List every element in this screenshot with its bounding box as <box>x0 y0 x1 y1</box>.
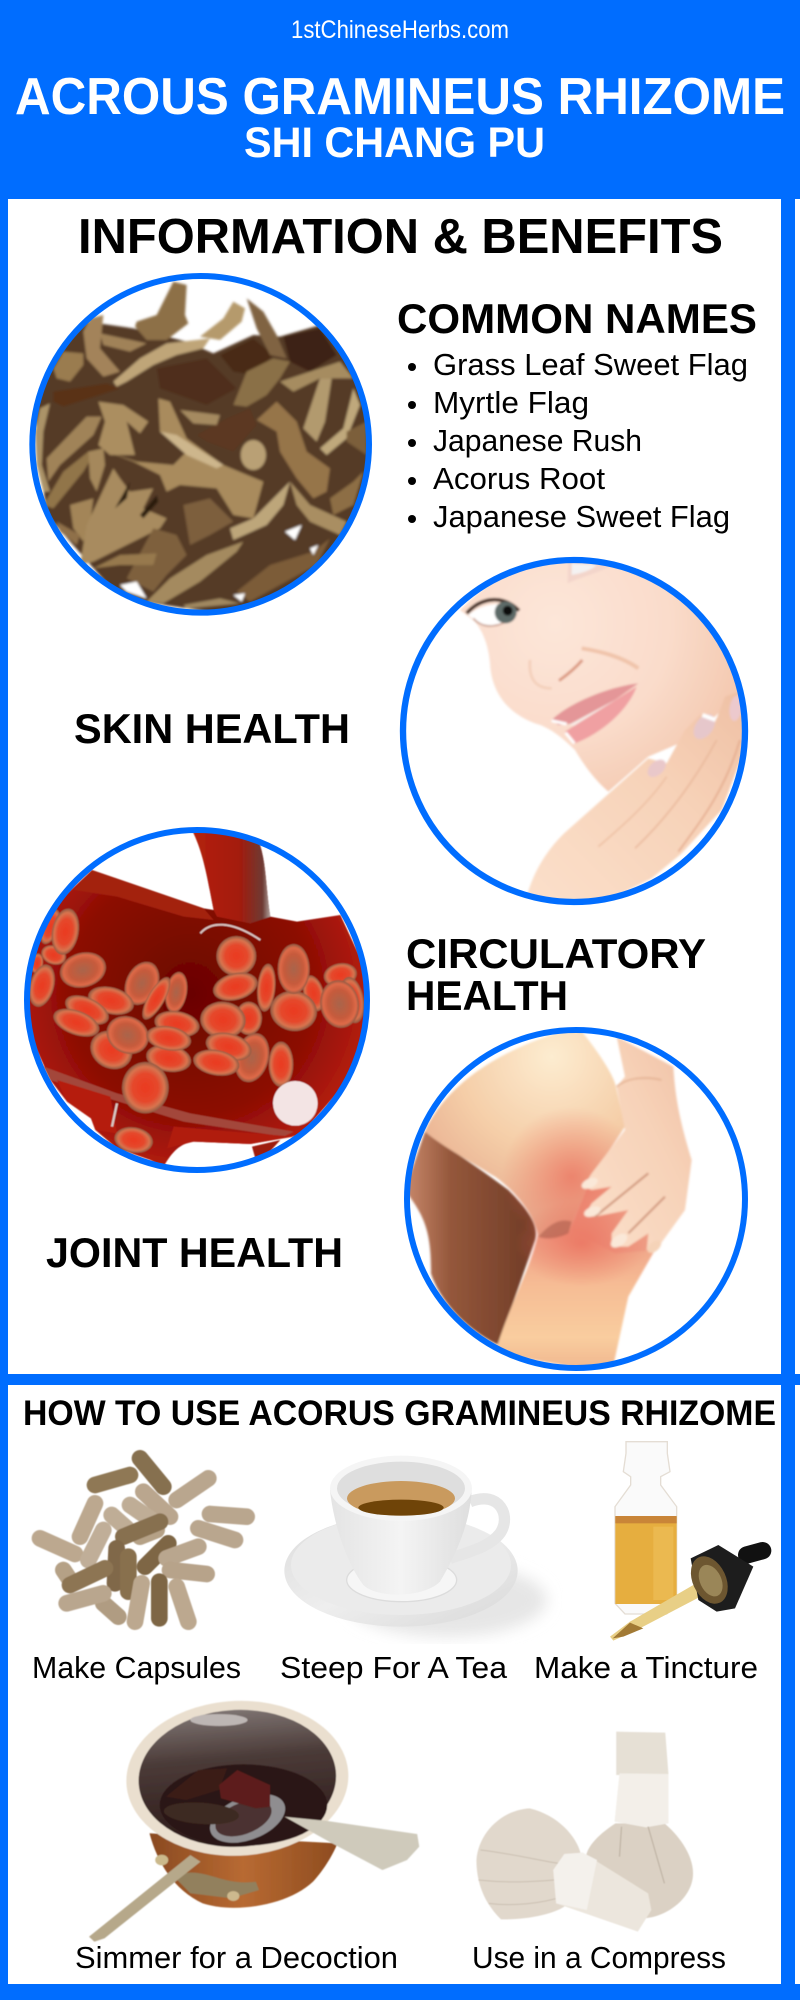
photo: painful knee <box>405 1027 745 1373</box>
heading: joint health: JOINT HEALTH <box>46 1229 343 1276</box>
list: common names: Japanese Sweet Flag <box>433 499 730 534</box>
list: common names: Japanese Rush <box>433 423 642 458</box>
caption: capsules: Make Capsules <box>32 1650 241 1685</box>
heading: circulatory health: CIRCULATORY <box>406 930 706 977</box>
subtitle: SHI CHANG PU <box>244 119 545 167</box>
icon: herbal compress bundles <box>476 1732 693 1932</box>
header <box>15 16 785 167</box>
photo: red blood cells <box>24 830 374 1170</box>
white blood cell <box>273 1081 318 1126</box>
list: common names: Myrtle Flag <box>433 385 589 420</box>
caption: compress: Use in a Compress <box>472 1940 726 1975</box>
right edge sliver top <box>795 199 800 1374</box>
photo: woman's face <box>403 557 748 907</box>
caption: decoction: Simmer for a Decoction <box>75 1940 398 1975</box>
site name: 1stChineseHerbs.com <box>291 16 509 44</box>
icon: tea cup <box>284 1456 547 1637</box>
list: common names <box>408 347 748 534</box>
panel: information and benefits <box>8 199 781 1374</box>
icon: copper pot with herbs <box>89 1692 419 1942</box>
list: common names: Grass Leaf Sweet Flag <box>433 347 748 382</box>
panel: how to use <box>8 1385 781 1984</box>
panel: information and benefits: HEALTH <box>406 972 568 1019</box>
list: common names: Acorus Root <box>433 461 605 496</box>
heading: skin health: SKIN HEALTH <box>74 705 350 752</box>
caption: tincture: Make a Tincture <box>534 1650 758 1685</box>
heading: information and benefits: INFORMATION & BENEFITS <box>78 210 723 264</box>
heading: common names: COMMON NAMES <box>397 295 757 342</box>
icon: capsules <box>40 1458 247 1622</box>
icon: tincture bottle and dropper <box>610 1442 763 1641</box>
photo: dried rhizome <box>20 265 380 625</box>
right edge sliver bottom <box>795 1385 800 1984</box>
caption: tea: Steep For A Tea <box>280 1650 508 1685</box>
heading: how to use: HOW TO USE ACORUS GRAMINEUS RHIZOME <box>23 1394 776 1433</box>
